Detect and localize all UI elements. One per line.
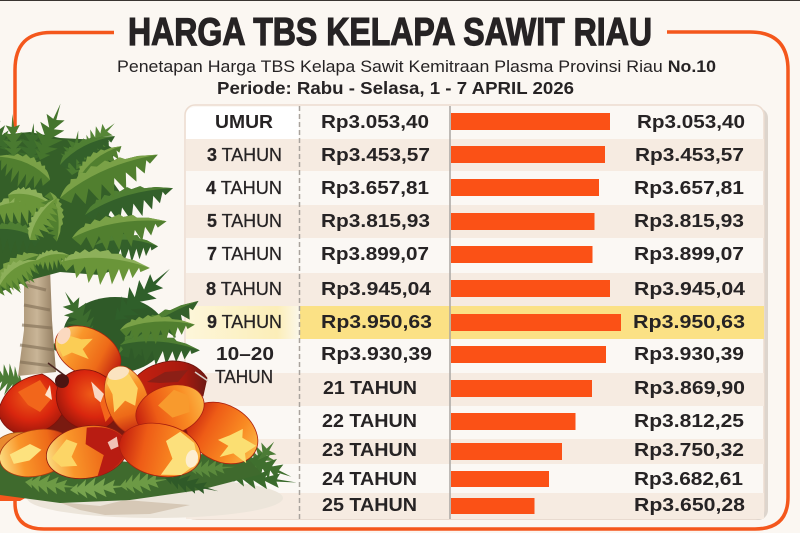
left lower frond — [0, 360, 25, 398]
age labels: 7 TAHUN — [207, 244, 282, 264]
price column: Rp3.453,57 — [321, 144, 430, 165]
value labels: Rp3.812,25 — [634, 410, 744, 431]
fruit: left red — [0, 374, 64, 435]
price column: Rp3.657,81 — [321, 177, 429, 198]
illustration: palm tree and fruit — [0, 99, 298, 518]
value labels: Rp3.945,04 — [634, 278, 746, 299]
highlighted row band — [186, 306, 764, 339]
lower palm fronds — [49, 258, 210, 373]
fruit: bottom center — [114, 416, 206, 484]
fruit stalk — [48, 363, 69, 388]
bar chart — [451, 113, 621, 514]
alternating row bands — [186, 139, 764, 519]
price column: Rp3.930,39 — [321, 343, 432, 364]
fruit: right orange — [175, 390, 269, 476]
value labels: Rp3.930,39 — [634, 343, 744, 364]
price column: Rp3.899,07 — [321, 243, 429, 264]
value labels: Rp3.657,81 — [634, 177, 744, 198]
age labels: TAHUN — [215, 367, 273, 387]
base foliage — [0, 433, 298, 503]
fruit shadow — [10, 395, 220, 455]
fruit: yellow middle — [96, 360, 158, 440]
price column: 24 TAHUN — [322, 468, 417, 489]
palm trunk — [18, 268, 56, 376]
age labels: 3 TAHUN — [207, 145, 282, 165]
price column: 23 TAHUN — [322, 439, 417, 460]
price column: 22 TAHUN — [322, 410, 417, 431]
fruit: center red — [44, 357, 132, 443]
price column — [321, 111, 432, 515]
value labels: Rp3.650,28 — [634, 494, 745, 515]
ground patch — [27, 478, 283, 518]
age labels: 4 TAHUN — [206, 178, 282, 198]
value labels: Rp3.899,07 — [634, 243, 744, 264]
fruit: mid orange — [129, 376, 211, 444]
value labels: Rp3.950,63 — [633, 311, 745, 332]
orange frame accent — [0, 495, 27, 501]
price column: Rp3.945,04 — [321, 278, 432, 299]
subtitle: Penetapan Harga TBS Kelapa Sawit Kemitraan Plasma Provinsi Riau No.10 — [117, 57, 716, 76]
age labels: 5 TAHUN — [207, 211, 282, 231]
age labels: 10–20 — [216, 343, 274, 364]
period line: Periode: Rabu - Selasa, 1 - 7 APRIL 2026 — [217, 78, 574, 98]
title: HARGA TBS KELAPA SAWIT RIAU — [128, 11, 652, 54]
column dividers — [300, 106, 450, 519]
price column: Rp3.053,40 — [321, 111, 429, 132]
price column: 25 TAHUN — [322, 494, 417, 515]
value labels — [633, 111, 746, 515]
table card — [185, 105, 768, 520]
fruit: bottom left — [42, 419, 132, 485]
price column: Rp3.950,63 — [321, 311, 432, 332]
value labels: Rp3.053,40 — [637, 111, 745, 132]
value labels: Rp3.815,93 — [634, 210, 744, 231]
price column: 21 TAHUN — [323, 377, 417, 398]
price table — [185, 105, 768, 520]
age labels: UMUR — [215, 111, 273, 132]
value labels: Rp3.453,57 — [635, 144, 744, 165]
palm crown — [0, 99, 178, 311]
price column: Rp3.815,93 — [321, 210, 430, 231]
age labels — [206, 111, 282, 387]
fruit: far left — [0, 423, 77, 483]
value labels: Rp3.682,61 — [634, 468, 743, 489]
age labels: 8 TAHUN — [206, 279, 282, 299]
fruit: dark red — [130, 361, 208, 410]
value labels: Rp3.869,90 — [634, 377, 745, 398]
value labels: Rp3.750,32 — [634, 439, 744, 460]
fruit: top orange — [46, 315, 130, 389]
age labels: 9 TAHUN — [207, 312, 282, 332]
